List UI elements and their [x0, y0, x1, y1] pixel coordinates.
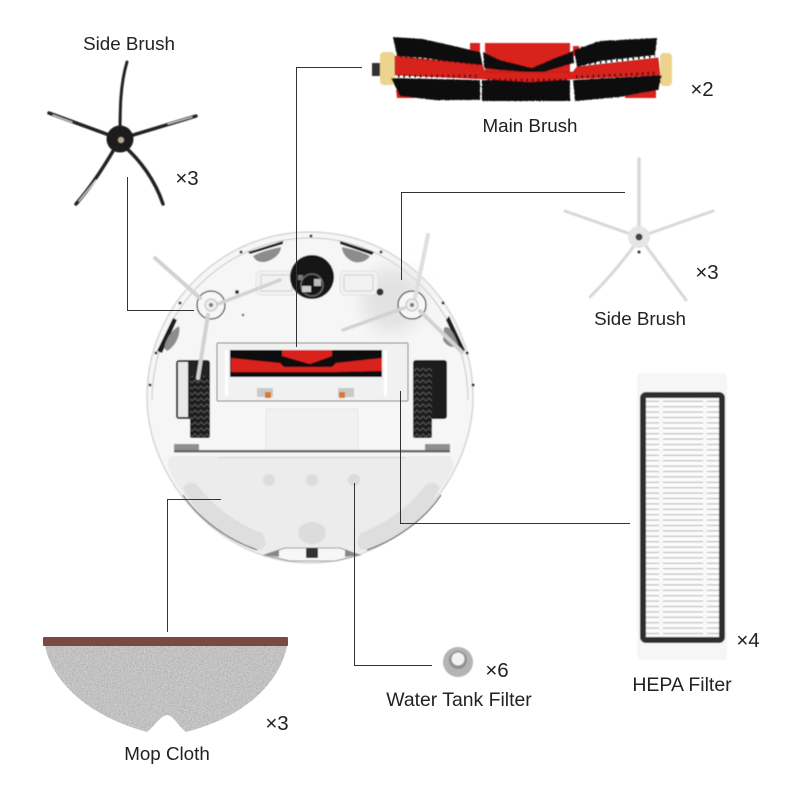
- label: side brush left: Side Brush: [83, 33, 175, 54]
- brush shadow: [362, 268, 422, 332]
- main brush product: [372, 37, 672, 101]
- quantity: side brush left: ×3: [175, 167, 199, 190]
- quantity: HEPA: ×4: [736, 629, 760, 652]
- housing window with brush: [230, 350, 382, 377]
- filter pleats: [646, 399, 719, 636]
- HEPA filter: [637, 373, 727, 660]
- mop pad right: [358, 483, 440, 550]
- mop cloth: [43, 637, 288, 732]
- sensor windows: [256, 271, 378, 295]
- quantity: side brush right: ×3: [695, 261, 719, 284]
- label: side brush right: Side Brush: [594, 308, 686, 329]
- quantity: water filter: ×6: [485, 659, 509, 682]
- left mini side brush: [155, 258, 280, 378]
- white side brush: [565, 159, 713, 300]
- label: mop cloth: Mop Cloth: [124, 743, 210, 764]
- label: water tank filter: Water Tank Filter: [386, 689, 532, 711]
- filter black seal: [643, 395, 722, 640]
- leader line: water tank filter: [354, 483, 432, 666]
- tank dots: [263, 474, 360, 544]
- brush clips: [257, 388, 354, 398]
- robot body: [147, 232, 473, 563]
- left drive wheel: [176, 360, 210, 438]
- water tank filter: [443, 647, 473, 677]
- filter outer frame: [637, 373, 727, 660]
- cloth band: [43, 637, 288, 646]
- pleat ribs: [659, 399, 707, 636]
- dust bin panel: [266, 409, 358, 451]
- divider bar: [174, 450, 450, 452]
- inner rim: [152, 238, 468, 400]
- leader line: right side brush: [402, 192, 625, 280]
- bristle roots: [398, 56, 656, 80]
- main brush housing: [217, 343, 408, 401]
- quantity: main brush: ×2: [690, 78, 714, 101]
- label: main brush: Main Brush: [482, 115, 578, 136]
- bristles: [391, 37, 662, 101]
- right mini side brush: [343, 235, 462, 352]
- water tank plate: [168, 456, 453, 553]
- red plates: [396, 43, 656, 98]
- leader line: HEPA filter: [400, 391, 630, 524]
- cliff sensors: [157, 241, 465, 354]
- main brush axle right: [660, 53, 672, 86]
- right drive wheel: [413, 360, 447, 438]
- small dots: [148, 234, 474, 386]
- leader line: mop cloth: [168, 500, 221, 632]
- quantity: mop cloth: ×3: [265, 712, 289, 735]
- caster wheel: [290, 255, 334, 299]
- cloth body: [45, 646, 287, 732]
- mop pad left: [183, 483, 265, 550]
- front sensor: [264, 548, 360, 561]
- red bar: [395, 56, 660, 82]
- robot vacuum underside: [147, 232, 474, 563]
- leader line: main brush: [296, 68, 362, 347]
- bin latches: [174, 444, 450, 450]
- main brush axle left: [372, 52, 395, 85]
- black side brush: [49, 62, 196, 204]
- leader line: left side brush: [128, 177, 194, 310]
- plate edge arcs: [183, 495, 441, 550]
- label: HEPA filter: HEPA Filter: [632, 674, 732, 696]
